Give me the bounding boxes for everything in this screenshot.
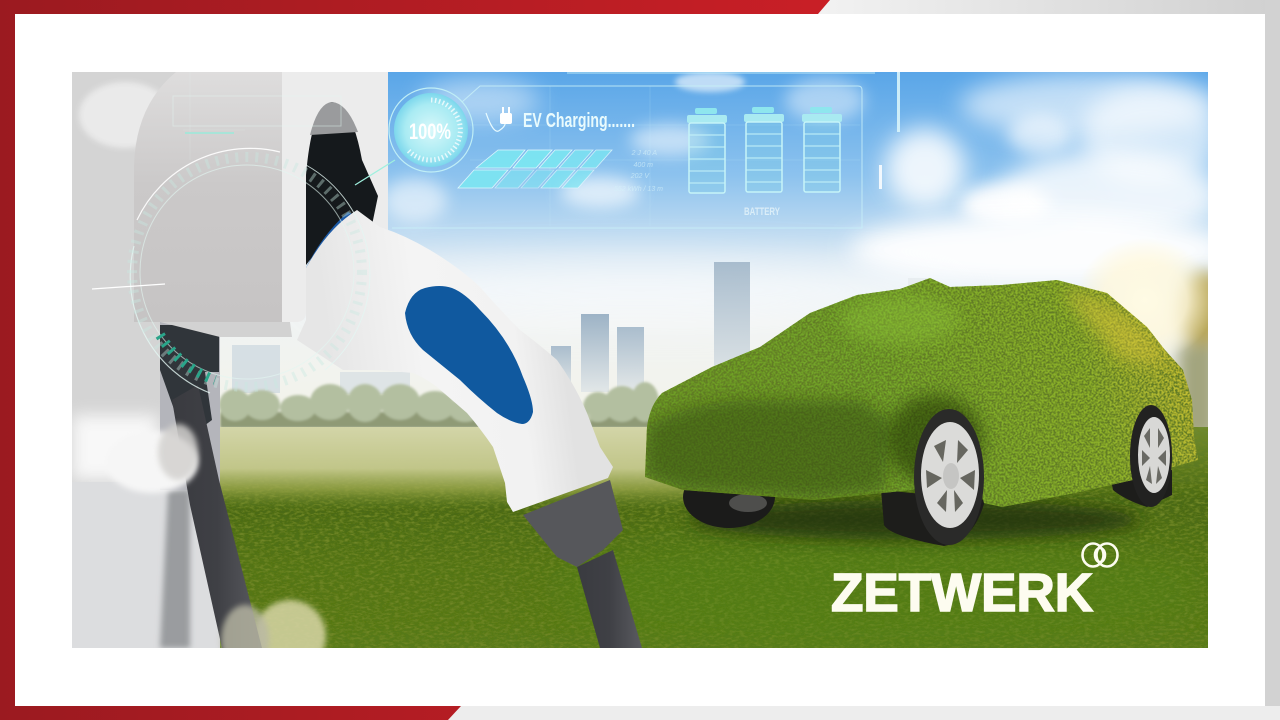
clouds: [310, 72, 1230, 320]
zetwerk logo: ZETWERK: [831, 563, 1093, 623]
tree right: [1168, 260, 1208, 427]
near rear wheel: [1130, 405, 1172, 507]
charging readouts: 552 kWh / 13 m: [614, 186, 663, 193]
icon: batteries: [687, 107, 842, 193]
plug handle: [297, 210, 642, 648]
tree line: [219, 382, 660, 428]
city skyline: [232, 262, 928, 394]
charger unit: [72, 72, 388, 675]
gauge 100%: 100%: [409, 119, 451, 144]
near tyre treads: [881, 490, 985, 546]
green car: [645, 278, 1198, 546]
ev charging label: EV Charging.......: [523, 110, 635, 132]
connector collar: [523, 480, 623, 567]
icon: interlocking rings: [1082, 544, 1118, 566]
sun glow: [1084, 244, 1208, 348]
far front wheel: [683, 490, 775, 528]
grass field: [220, 427, 1208, 648]
car shadow: [690, 500, 1140, 540]
charging readouts: 202 V: [630, 173, 650, 180]
battery cell grid: [458, 150, 612, 188]
near front wheel: [914, 409, 984, 545]
charging readouts: [621, 150, 663, 191]
car body: [645, 278, 1198, 507]
hologram dial: [92, 72, 395, 393]
battery label: BATTERY: [744, 206, 780, 218]
car shading: [646, 290, 1170, 498]
charging readouts: 2 J 40 A: [631, 150, 657, 157]
charging readouts: 400 m: [634, 162, 653, 169]
zetwerk logo: [832, 542, 1119, 612]
sky: [220, 72, 1208, 427]
icon: plug: [486, 107, 512, 131]
blue grip: [405, 286, 533, 424]
gauge 100%: [389, 88, 473, 172]
cable: [577, 550, 642, 648]
hud panel: [389, 72, 900, 228]
photo panel: [72, 72, 1233, 675]
